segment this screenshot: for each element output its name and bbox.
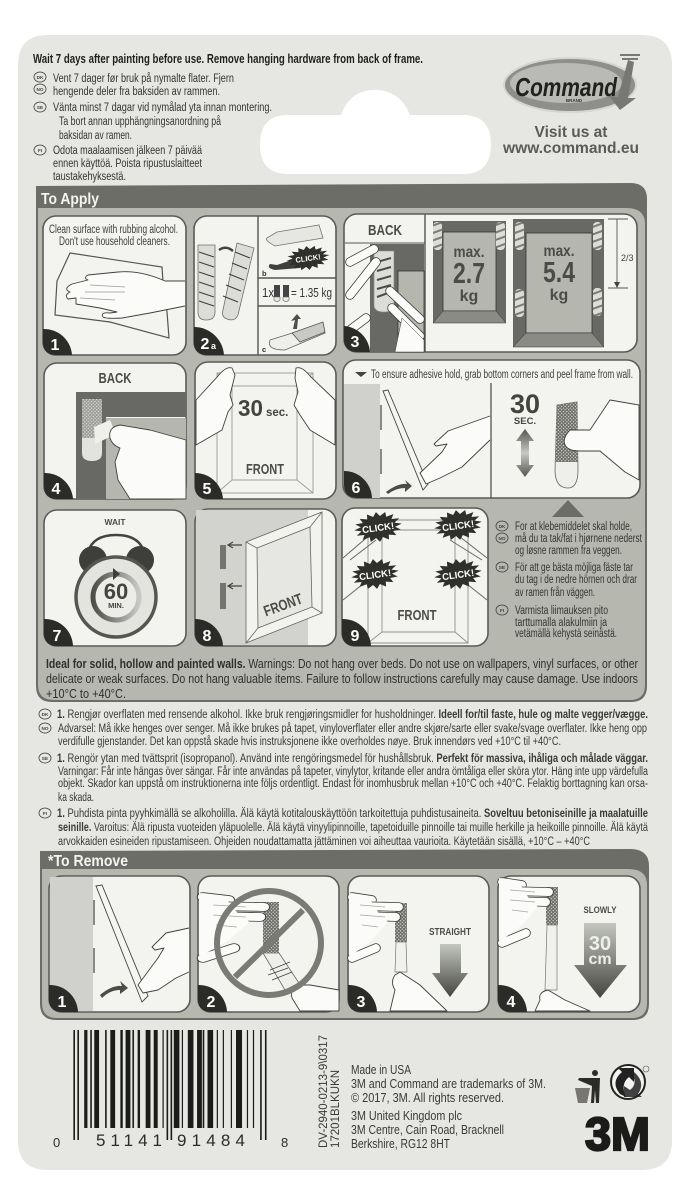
translated peel instructions: SE [499, 565, 505, 570]
right hand [294, 368, 335, 445]
weight per strip: 1x [262, 285, 274, 300]
click bursts: CLICK! [361, 521, 395, 536]
heading text: To Apply [41, 191, 99, 208]
step number 7 [44, 619, 73, 646]
rotated print codes [318, 1035, 342, 1148]
arrow with 30 cm: 30 [589, 933, 611, 955]
30 sec text: sec. [266, 407, 288, 419]
legal and address text [351, 1063, 546, 1151]
step 9: click strips [342, 507, 488, 646]
30 sec press with arrow: SEC. [514, 416, 536, 427]
click bursts [349, 507, 484, 592]
badge FI [34, 145, 46, 155]
body copy: ka skada. [58, 792, 94, 804]
strip with thumb [555, 400, 639, 488]
click illustration b [262, 225, 331, 278]
remove step 3: straight [348, 876, 489, 1012]
wall and frame [344, 384, 490, 498]
large frame max 5.4 kg [513, 219, 604, 347]
body copy [57, 709, 648, 848]
weight per strip: = 1.35 kg [291, 285, 332, 300]
translated warnings: Ta bort annan upphängningsanordning på [59, 116, 221, 128]
two-thirds dimension: 2/3 [621, 253, 634, 263]
remove step 1 [49, 876, 190, 1012]
legal and address text: © 2017, 3M. All rights reserved. [351, 1091, 504, 1105]
step number 2a [194, 327, 224, 355]
callout pointer triangle [552, 500, 584, 517]
barcode digits: 91484 [177, 1131, 245, 1150]
step 6: peel frame [343, 360, 640, 498]
translated warnings: Vänta minst 7 dagar vid nymålad yta innan montering. [53, 102, 272, 114]
translated warnings: ennen käyttöä. Poista ripustuslaitteet [53, 158, 203, 170]
FRONT label: FRONT [398, 608, 437, 624]
number 4: 4 [507, 994, 516, 1011]
legal and address text: 3M Centre, Cain Road, Bracknell [351, 1123, 504, 1137]
number 1: 1 [58, 994, 67, 1011]
remove step 4: slowly 30 cm [498, 876, 640, 1012]
step 8: mount frame [195, 509, 336, 646]
number 2 [198, 985, 227, 1012]
translated peel instructions: tarttumalla alakulmiin ja [515, 617, 607, 629]
step 2: strips assembly [194, 216, 336, 355]
left hand [196, 368, 235, 445]
body copy: 1. Rengjør overflaten med rensende alkohol. Ikke bruk rengjøringsmidler for husholdninger. Ideell for/til faste, hule og malte vegger/vægge. [57, 709, 648, 721]
clock: MIN. [108, 601, 124, 610]
remove step 2: do not pull at angle [198, 876, 339, 1012]
translated peel instructions: DK [499, 524, 506, 529]
number 3: 3 [357, 994, 366, 1011]
FRONT label: FRONT [246, 462, 284, 478]
language badges: DK [42, 712, 49, 717]
icon: green dot [611, 1065, 649, 1099]
step number 8: 8 [203, 628, 212, 645]
Command logo: Command [515, 72, 618, 102]
step 4: remove liner [44, 363, 186, 499]
panel: To Apply [36, 183, 647, 702]
translated warnings: Odota maalaamisen jälkeen 7 päivää [53, 145, 202, 157]
wall suitability and warnings: +10°C to +40°C. [46, 686, 126, 701]
30 sec press with arrow: 30 [510, 389, 540, 419]
translated peel instructions: og løsne rammen fra veggen. [515, 545, 622, 557]
illustration c [262, 314, 325, 354]
language badges: SE [42, 756, 48, 761]
30 sec text: 30 [238, 395, 263, 421]
prohibition sign [217, 891, 321, 995]
step 1: clean surface: Clean surface with rubbing alcohol. [49, 224, 178, 236]
number 4 [498, 985, 527, 1012]
barcode digits: 8 [281, 1135, 288, 1150]
click bursts: CLICK! [441, 519, 475, 534]
badge NO [34, 84, 46, 94]
30 sec text [238, 395, 288, 421]
clock [76, 535, 156, 637]
translated warnings: baksidan av ramen. [59, 130, 132, 142]
click illustration b: b [262, 269, 267, 278]
arrow [432, 944, 468, 997]
step number 4: 4 [52, 481, 61, 498]
badge NO: NO [37, 87, 44, 92]
panel: To Remove [40, 849, 649, 1020]
step number 2a: 2 [201, 336, 210, 353]
BACK label: BACK [368, 222, 402, 239]
legal and address text: Made in USA [351, 1063, 412, 1077]
barcode [53, 1030, 288, 1150]
number 1 [49, 985, 78, 1012]
website text: Visit us at [535, 124, 607, 141]
arrows to wall [228, 542, 242, 589]
STRAIGHT label: STRAIGHT [429, 927, 471, 938]
language badges [39, 709, 51, 818]
translated peel instructions: vetämällä kehystä seinästä. [515, 628, 617, 640]
body copy: 1. Rengör ytan med tvättsprit (isopropanol). Använd inte rengöringsmedel för hushållsbruk. Perfekt för massiva, ihåliga och målade väggar. [57, 753, 648, 765]
translated peel instructions: For at klebemiddelet skal holde, [515, 521, 632, 533]
wall strips [220, 545, 226, 609]
weight per strip [262, 285, 332, 302]
translated peel instructions: NO [499, 536, 506, 541]
step number 7: 7 [53, 628, 62, 645]
small frame max 2.7 kg: max. [454, 244, 484, 261]
number 2: 2 [207, 994, 216, 1011]
step number 9: 9 [351, 628, 360, 645]
step number 1: 1 [51, 337, 60, 354]
badge SE [34, 102, 46, 112]
translated peel instructions: må du ta tak/fat i hjørnene nederst [515, 533, 643, 545]
large frame max 5.4 kg: max. [544, 243, 574, 260]
illustration c: c [262, 345, 266, 354]
back of frame with hand [350, 244, 424, 352]
multilingual text block [39, 709, 648, 848]
clock: 60 [104, 579, 128, 604]
small frame max 2.7 kg [433, 221, 506, 323]
website text [502, 124, 639, 157]
strip pair [198, 243, 254, 320]
large frame max 5.4 kg: 5.4 [543, 257, 575, 289]
step number 2a: a [211, 341, 217, 351]
legal and address text: 3M United Kingdom plc [351, 1109, 462, 1123]
barcode digits [53, 1131, 288, 1150]
translated warnings: hengende deler fra baksiden av rammen. [53, 86, 220, 98]
translated peel instructions: För att ge bästa möjliga fäste tar [515, 562, 633, 574]
step number 5 [195, 473, 223, 499]
step 3: press strips and weight limits [344, 214, 637, 352]
number 3 [348, 985, 377, 1012]
large frame max 5.4 kg: kg [550, 287, 568, 304]
legal and address text: Berkshire, RG12 8HT [351, 1137, 450, 1151]
step 5: press for 30 sec [195, 362, 336, 499]
step number 6 [344, 471, 372, 498]
pointer triangle [355, 372, 367, 377]
step number 3 [344, 326, 370, 352]
Command logo: BRAND [566, 98, 583, 103]
body copy: verdifulle gjenstander. Det kan oppstå skade hvis instruksjonene ikke overholdes nøye. Bruk innendørs ved +10°C til +40°C. [58, 736, 561, 748]
small frame max 2.7 kg: 2.7 [453, 258, 485, 290]
small frame max 2.7 kg: kg [460, 288, 478, 305]
badge DK [34, 72, 46, 82]
step 1: clean surface [43, 216, 186, 355]
click illustration b: CLICK! [295, 252, 321, 265]
step 1: clean surface: Don't use household cleaners. [59, 236, 170, 248]
legal and address text: 3M and Command are trademarks of 3M. [351, 1077, 546, 1091]
language badges: NO [42, 726, 49, 731]
step number 9 [342, 619, 371, 646]
30 sec press with arrow [510, 389, 540, 477]
rotated print codes: 17201BLKUKN [330, 1070, 342, 1148]
translated peel instructions: Varmista liimauksen pito [515, 605, 608, 617]
wall suitability and warnings [46, 656, 639, 701]
click bursts: CLICK! [441, 568, 475, 583]
barcode digits: 51141 [96, 1131, 162, 1150]
badge SE: SE [37, 105, 43, 110]
arrow with 30 cm: cm [588, 951, 612, 968]
Command logo [504, 55, 640, 112]
click bursts: CLICK! [358, 568, 392, 583]
FRONT label: FRONT [261, 591, 305, 620]
translated warnings: taustakehyksestä. [53, 171, 126, 183]
translated peel instructions: av ramen från väggen. [515, 587, 595, 599]
badge FI: FI [38, 148, 42, 153]
step number 8 [195, 619, 223, 646]
step number 6: 6 [352, 480, 361, 497]
step number 3: 3 [351, 334, 360, 351]
step number 4 [44, 473, 73, 499]
barcode digits: 0 [53, 1135, 60, 1150]
body copy: 1. Puhdista pinta pyyhkimällä se alkoholilla. Älä käytä kotitalouskäyttöön tarkoitettuja puhdistusaineita. Soveltuu betoniseinille ja maalatuille [57, 808, 648, 820]
website text: www.command.eu [502, 140, 639, 157]
translated peel instructions [496, 521, 643, 640]
two-thirds dimension [608, 219, 634, 288]
translated peel instructions: du tag i de nedre hörnen och drar [515, 574, 637, 586]
arrow with 30 cm [574, 923, 627, 998]
WAIT label: WAIT [104, 517, 126, 527]
SLOWLY label: SLOWLY [584, 905, 617, 916]
3M logo: 3M [585, 1108, 650, 1160]
top warning text block [33, 52, 423, 183]
heading: paint warning: Wait 7 days after painting before use. Remove hanging hardware from back of frame. [33, 52, 423, 66]
heading: *To Remove [48, 853, 128, 870]
icon: tidyman recycling bin [575, 1070, 600, 1103]
translated peel instructions: FI [500, 608, 504, 613]
step number 1 [43, 329, 72, 355]
rotated print codes: DV-2940-0213-9\0317 [318, 1035, 330, 1148]
translated warnings [53, 73, 272, 183]
step 7: wait 60 min clock [44, 510, 186, 646]
BACK label: BACK [98, 370, 132, 387]
badge DK: DK [37, 75, 44, 80]
language badges: FI [43, 811, 47, 816]
frame [246, 512, 322, 643]
step number 5: 5 [203, 481, 212, 498]
translated warnings: Vent 7 dager før bruk på nymalte flater. Fjern [53, 73, 234, 85]
